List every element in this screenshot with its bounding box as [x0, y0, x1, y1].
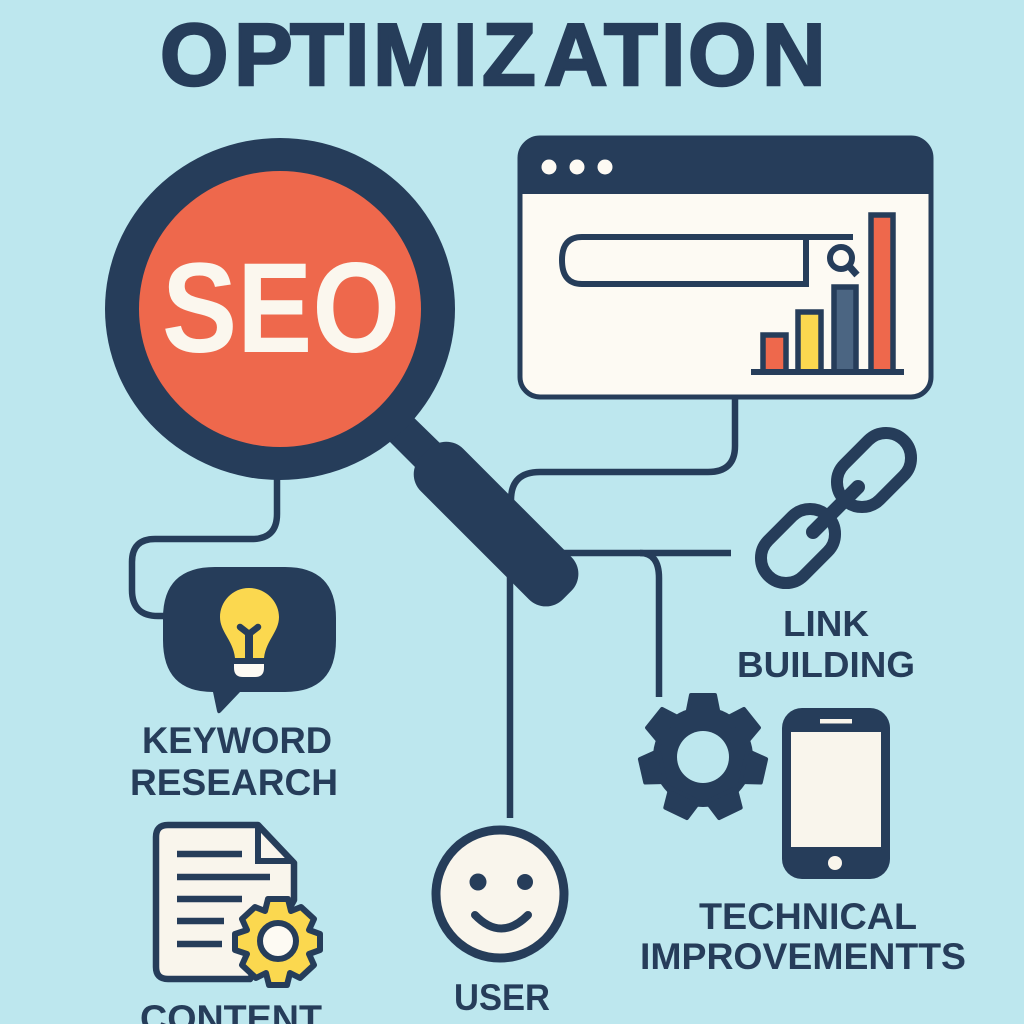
title: OPTIMIZATION [160, 5, 826, 104]
label: technical improvements: TECHNICAL [699, 896, 917, 937]
gear [235, 899, 320, 985]
label: keyword research: KEYWORD [142, 720, 332, 761]
icon: gear [639, 695, 767, 820]
icon: chain link [751, 423, 921, 593]
icon: speech bubble with lightbulb [163, 567, 336, 713]
label: keyword research: RESEARCH [130, 762, 338, 803]
bar chart [751, 215, 904, 372]
label: user experience [384, 977, 616, 1024]
icon: smiley face [436, 830, 564, 958]
icon: document with gear [156, 825, 320, 985]
panel: browser window [520, 138, 931, 397]
search bar [562, 237, 853, 284]
connector lines [132, 396, 735, 818]
label: user experience: USER [454, 977, 550, 1018]
label: technical improvements [640, 896, 966, 977]
label: link building: LINK [783, 603, 869, 644]
label: keyword research [130, 720, 338, 803]
icon: smartphone [782, 708, 890, 879]
label: link building [737, 603, 915, 685]
label: technical improvements: IMPROVEMENTTS [640, 936, 966, 977]
label: link building: BUILDING [737, 644, 915, 685]
SEO lens label: SEO [162, 237, 400, 380]
icon: small magnifier [830, 247, 857, 275]
icon: magnifying glass with SEO [105, 138, 588, 616]
